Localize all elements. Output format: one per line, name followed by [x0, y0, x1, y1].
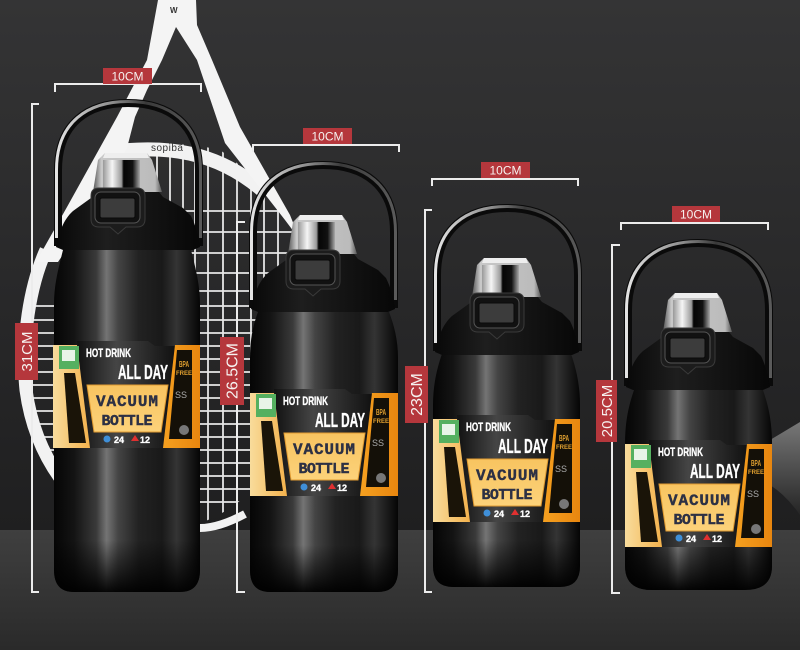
bottle 1 label: 24 [114, 435, 124, 445]
bottle 2 body [250, 312, 398, 592]
bottle 4 label: VACUUM [668, 492, 730, 510]
bottle 2 label: ALL DAY [315, 410, 365, 432]
bottle 4 body [625, 390, 772, 590]
bottle 3 label: BOTTLE [482, 487, 532, 504]
bottle 2 label [250, 389, 398, 496]
racket brand text: sopiba [151, 143, 183, 154]
bottle 4 label: BOTTLE [674, 512, 724, 529]
dimension: bottle 1 width [55, 68, 201, 92]
bottle 4 label [625, 440, 772, 547]
bottle 2 label: 24 [311, 483, 321, 493]
dimension: bottle 2 width [253, 128, 399, 152]
bottle 3 label: ALL DAY [498, 436, 548, 458]
bottle 4 label: BPA [751, 459, 761, 468]
dimension: bottle 3 height [405, 210, 432, 592]
bottle 3 label: FREE [556, 445, 572, 451]
bottle 4 label: HOT DRINK [658, 445, 703, 459]
racket logo mark: W [170, 6, 178, 15]
bottle 1 top assembly [56, 102, 200, 250]
bottle 1 body [54, 250, 200, 592]
bottle 3 top assembly [435, 206, 580, 355]
bottle 3 label: HOT DRINK [466, 420, 511, 434]
dimension: bottle 4 width: 10CM [680, 208, 712, 222]
bottle 1 label: HOT DRINK [86, 346, 131, 360]
bottle 4 label: SS [747, 489, 759, 499]
bottle 4 label: FREE [748, 470, 764, 476]
bottle 3 base shade [433, 540, 580, 587]
dimension: bottle 3 width [432, 162, 578, 186]
bottle 2 label: BPA [376, 408, 386, 417]
bottle 1 label [53, 341, 200, 448]
bottle 4 label: 12 [712, 534, 722, 544]
bottle 1 label: ALL DAY [118, 362, 168, 384]
bottle 2 label: HOT DRINK [283, 394, 328, 408]
dimension: bottle 3 width: 10CM [489, 164, 522, 178]
dimension: bottle 1 height [15, 104, 39, 592]
bottle 2 label: FREE [373, 419, 389, 425]
bottle 3 label [433, 415, 580, 522]
dimension: bottle 2 height: 26.5CM [224, 343, 242, 399]
bottle 3 [433, 206, 580, 587]
dimension: bottle 3 height: 23CM [409, 373, 426, 416]
bottle 4 label: 24 [686, 534, 696, 544]
bottle 4 base shade [625, 545, 772, 590]
dimension: bottle 1 height: 31CM [19, 331, 36, 372]
bottle 2 [250, 164, 398, 592]
bottle 3 label: SS [555, 464, 567, 474]
bottle 4 [625, 242, 772, 590]
dimension: bottle 4 height [596, 245, 620, 593]
grey object at right edge [770, 422, 800, 515]
bottle 3 label: 12 [520, 509, 530, 519]
bottle 1 label: SS [175, 390, 187, 400]
bottle 2 base shade [250, 545, 398, 592]
bottle 3 body [433, 354, 580, 587]
bottle 4 label: ALL DAY [690, 461, 740, 483]
bottle 3 label: VACUUM [476, 467, 538, 485]
bottle 2 label: 12 [337, 483, 347, 493]
dimension: bottle 1 width: 10CM [111, 70, 144, 84]
bottle 2 top assembly [251, 164, 396, 312]
bottle 2 label: VACUUM [293, 441, 355, 459]
bottle 2 label: SS [372, 438, 384, 448]
bottle 1 label: 12 [140, 435, 150, 445]
dimension: bottle 2 width: 10CM [311, 130, 344, 144]
bottle 1 label: FREE [176, 371, 192, 377]
bottle 4 top assembly [626, 242, 770, 390]
bottle 1 label: BPA [179, 360, 189, 369]
bottle 1 base shade [54, 540, 200, 592]
bottle 3 label: 24 [494, 509, 504, 519]
bottle 1 label: VACUUM [96, 393, 158, 411]
bottle 2 label: BOTTLE [298, 461, 350, 478]
dimension: bottle 2 height [220, 222, 245, 592]
dimension: bottle 4 height: 20.5CM [599, 385, 616, 437]
bottle 1 [53, 102, 200, 592]
floor [0, 530, 800, 650]
bottle 3 label: BPA [559, 434, 569, 443]
dimension: bottle 4 width [621, 206, 768, 230]
bottle 1 label: BOTTLE [102, 413, 152, 430]
tennis racket [18, 0, 293, 532]
